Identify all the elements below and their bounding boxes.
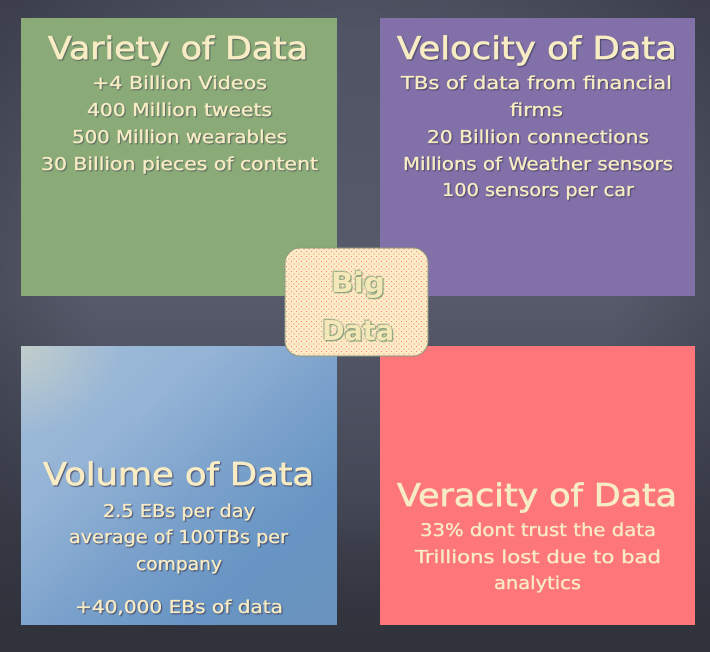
text block: variety facts: 30 Billion pieces of content	[41, 154, 318, 175]
text block: variety facts: 400 Million tweets	[87, 100, 272, 121]
text block: veracity facts: analytics	[494, 573, 581, 594]
text block: velocity facts: 100 sensors per car	[442, 180, 635, 201]
text block: velocity facts: TBs of data from financial	[400, 73, 672, 94]
text block: volume facts: +40,000 EBs of data	[75, 597, 283, 618]
text block: velocity facts	[400, 73, 673, 201]
text block: volume facts: company	[136, 554, 222, 575]
text block: velocity facts: 20 Billion connections	[427, 127, 649, 148]
heading: volume of data: Volume of Data	[43, 457, 314, 493]
text block: veracity facts: Trillions lost due to bad	[414, 547, 661, 568]
heading: big data: Big	[331, 266, 385, 299]
panel: veracity of data	[380, 346, 695, 625]
panel: velocity of data	[380, 18, 695, 296]
text block: volume facts: average of 100TBs per	[69, 527, 289, 548]
heading: veracity of data: Veracity of Data	[397, 478, 677, 514]
text block: variety facts	[41, 73, 318, 175]
text block: variety facts: 500 Million wearables	[72, 127, 287, 148]
heading: big data	[322, 266, 394, 347]
text block: veracity facts: 33% dont trust the data	[420, 520, 656, 541]
heading: big data: Data	[322, 314, 394, 347]
text block: veracity facts	[414, 520, 661, 594]
text block: velocity facts: firms	[510, 100, 563, 121]
center badge: big data	[285, 248, 428, 356]
panel: volume of data	[21, 346, 337, 625]
text block: volume facts	[69, 501, 289, 618]
heading: variety of data: Variety of Data	[48, 31, 308, 67]
text block: velocity facts: Millions of Weather sensors	[403, 154, 673, 175]
heading: velocity of data: Velocity of Data	[397, 31, 677, 67]
text block: volume facts: 2.5 EBs per day	[103, 501, 255, 522]
text block: variety facts: +4 Billion Videos	[92, 73, 267, 94]
panel: variety of data	[21, 18, 337, 296]
